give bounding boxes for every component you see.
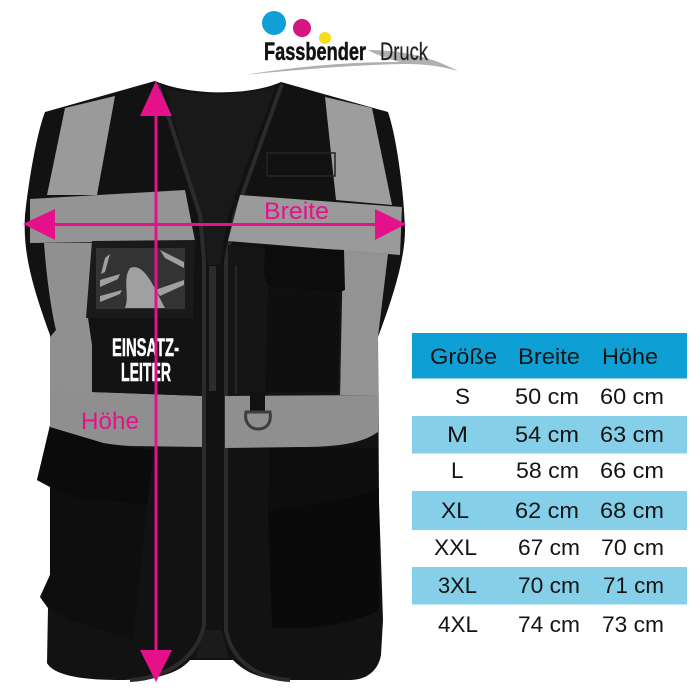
print line 2: LEITER — [121, 357, 171, 387]
reflective band lower right — [225, 395, 378, 448]
lower left pocket flap — [37, 427, 154, 505]
reflective band left chest — [30, 190, 195, 243]
header Höhe: Höhe — [602, 344, 658, 369]
row L: 66 cm — [600, 458, 664, 483]
reflective strap left upper — [47, 96, 115, 195]
top arrowhead — [140, 81, 172, 116]
row S: 50 cm — [515, 384, 579, 409]
row L: 58 cm — [516, 458, 579, 483]
lower right pocket body — [268, 488, 379, 628]
upper small pocket — [267, 153, 335, 176]
row 3XL: 71 cm — [603, 573, 664, 598]
reflective strap left lower — [44, 243, 92, 395]
vest print: EINSATZ-LEITER — [112, 334, 179, 387]
row M: M — [447, 422, 468, 447]
header Breite: Breite — [518, 344, 580, 369]
row M: 63 cm — [600, 422, 664, 447]
row M — [412, 416, 687, 454]
label Breite: Breite — [264, 198, 329, 225]
row XL: XL — [441, 498, 469, 523]
id holder window — [96, 248, 185, 309]
logo dot cyan — [262, 11, 286, 35]
reflective strap right lower — [340, 250, 388, 395]
horizontal line — [45, 223, 385, 226]
vest inner neck — [165, 86, 276, 265]
row S: S — [455, 384, 470, 409]
chest pocket outline — [235, 265, 237, 394]
vertical line — [154, 100, 158, 675]
vest body — [25, 81, 405, 680]
reflective band right chest — [228, 195, 402, 255]
logo swoosh — [244, 50, 458, 75]
zipper — [209, 266, 216, 391]
arrow: Höhe — [140, 81, 172, 682]
row XXL: XXL — [434, 535, 477, 560]
bottom arrowhead — [140, 650, 172, 682]
print line 1: EINSATZ- — [112, 334, 179, 362]
logo wordmark Fassbender: Fassbender — [264, 38, 366, 66]
vest inner hem panel — [196, 630, 228, 658]
logo wordmark Druck: Druck — [380, 38, 428, 66]
id holder frame — [86, 240, 195, 318]
row 3XL: 70 cm — [518, 573, 580, 598]
right chest pocket panel — [228, 245, 342, 395]
row L — [451, 458, 664, 483]
reflective strap right upper — [325, 97, 392, 205]
header Größe: Größe — [430, 344, 497, 369]
row XL — [412, 491, 687, 530]
row S: 60 cm — [600, 384, 664, 409]
vest — [25, 81, 405, 680]
logo: Fassbender Druck — [244, 11, 458, 75]
lower right pocket flap — [268, 448, 378, 510]
row M: 54 cm — [515, 422, 579, 447]
left chest panel — [92, 318, 202, 396]
arrow: Breite — [23, 209, 406, 240]
right arrowhead — [375, 209, 406, 240]
row 3XL — [412, 567, 687, 604]
logo dot yellow — [319, 32, 331, 44]
row XXL: 70 cm — [601, 535, 664, 560]
row XXL: 67 cm — [518, 535, 580, 560]
row 3XL: 3XL — [438, 573, 477, 598]
header bar — [412, 333, 687, 378]
label Höhe: Höhe — [81, 408, 139, 435]
table header — [412, 333, 687, 378]
size table — [412, 333, 687, 637]
row XXL — [434, 535, 664, 560]
chest pocket flap — [264, 246, 345, 292]
id holder — [86, 240, 195, 318]
id window glare — [100, 250, 184, 308]
row 4XL: 74 cm — [518, 612, 580, 637]
lower left pocket body — [40, 487, 147, 640]
row 4XL — [438, 612, 664, 637]
d-ring strap — [250, 392, 265, 412]
row S — [455, 384, 664, 409]
row 4XL: 73 cm — [602, 612, 664, 637]
row L: L — [451, 458, 464, 483]
chest pocket body — [265, 288, 340, 392]
row 4XL: 4XL — [438, 612, 478, 637]
d-ring loop — [246, 412, 270, 429]
row XL: 68 cm — [600, 498, 664, 523]
reflective band lower left — [50, 385, 202, 447]
left arrowhead — [23, 209, 55, 240]
left zip binding — [130, 84, 204, 680]
right zip binding — [226, 84, 290, 680]
d-ring — [246, 392, 270, 429]
row XL: 62 cm — [515, 498, 579, 523]
logo dot magenta — [293, 19, 311, 37]
